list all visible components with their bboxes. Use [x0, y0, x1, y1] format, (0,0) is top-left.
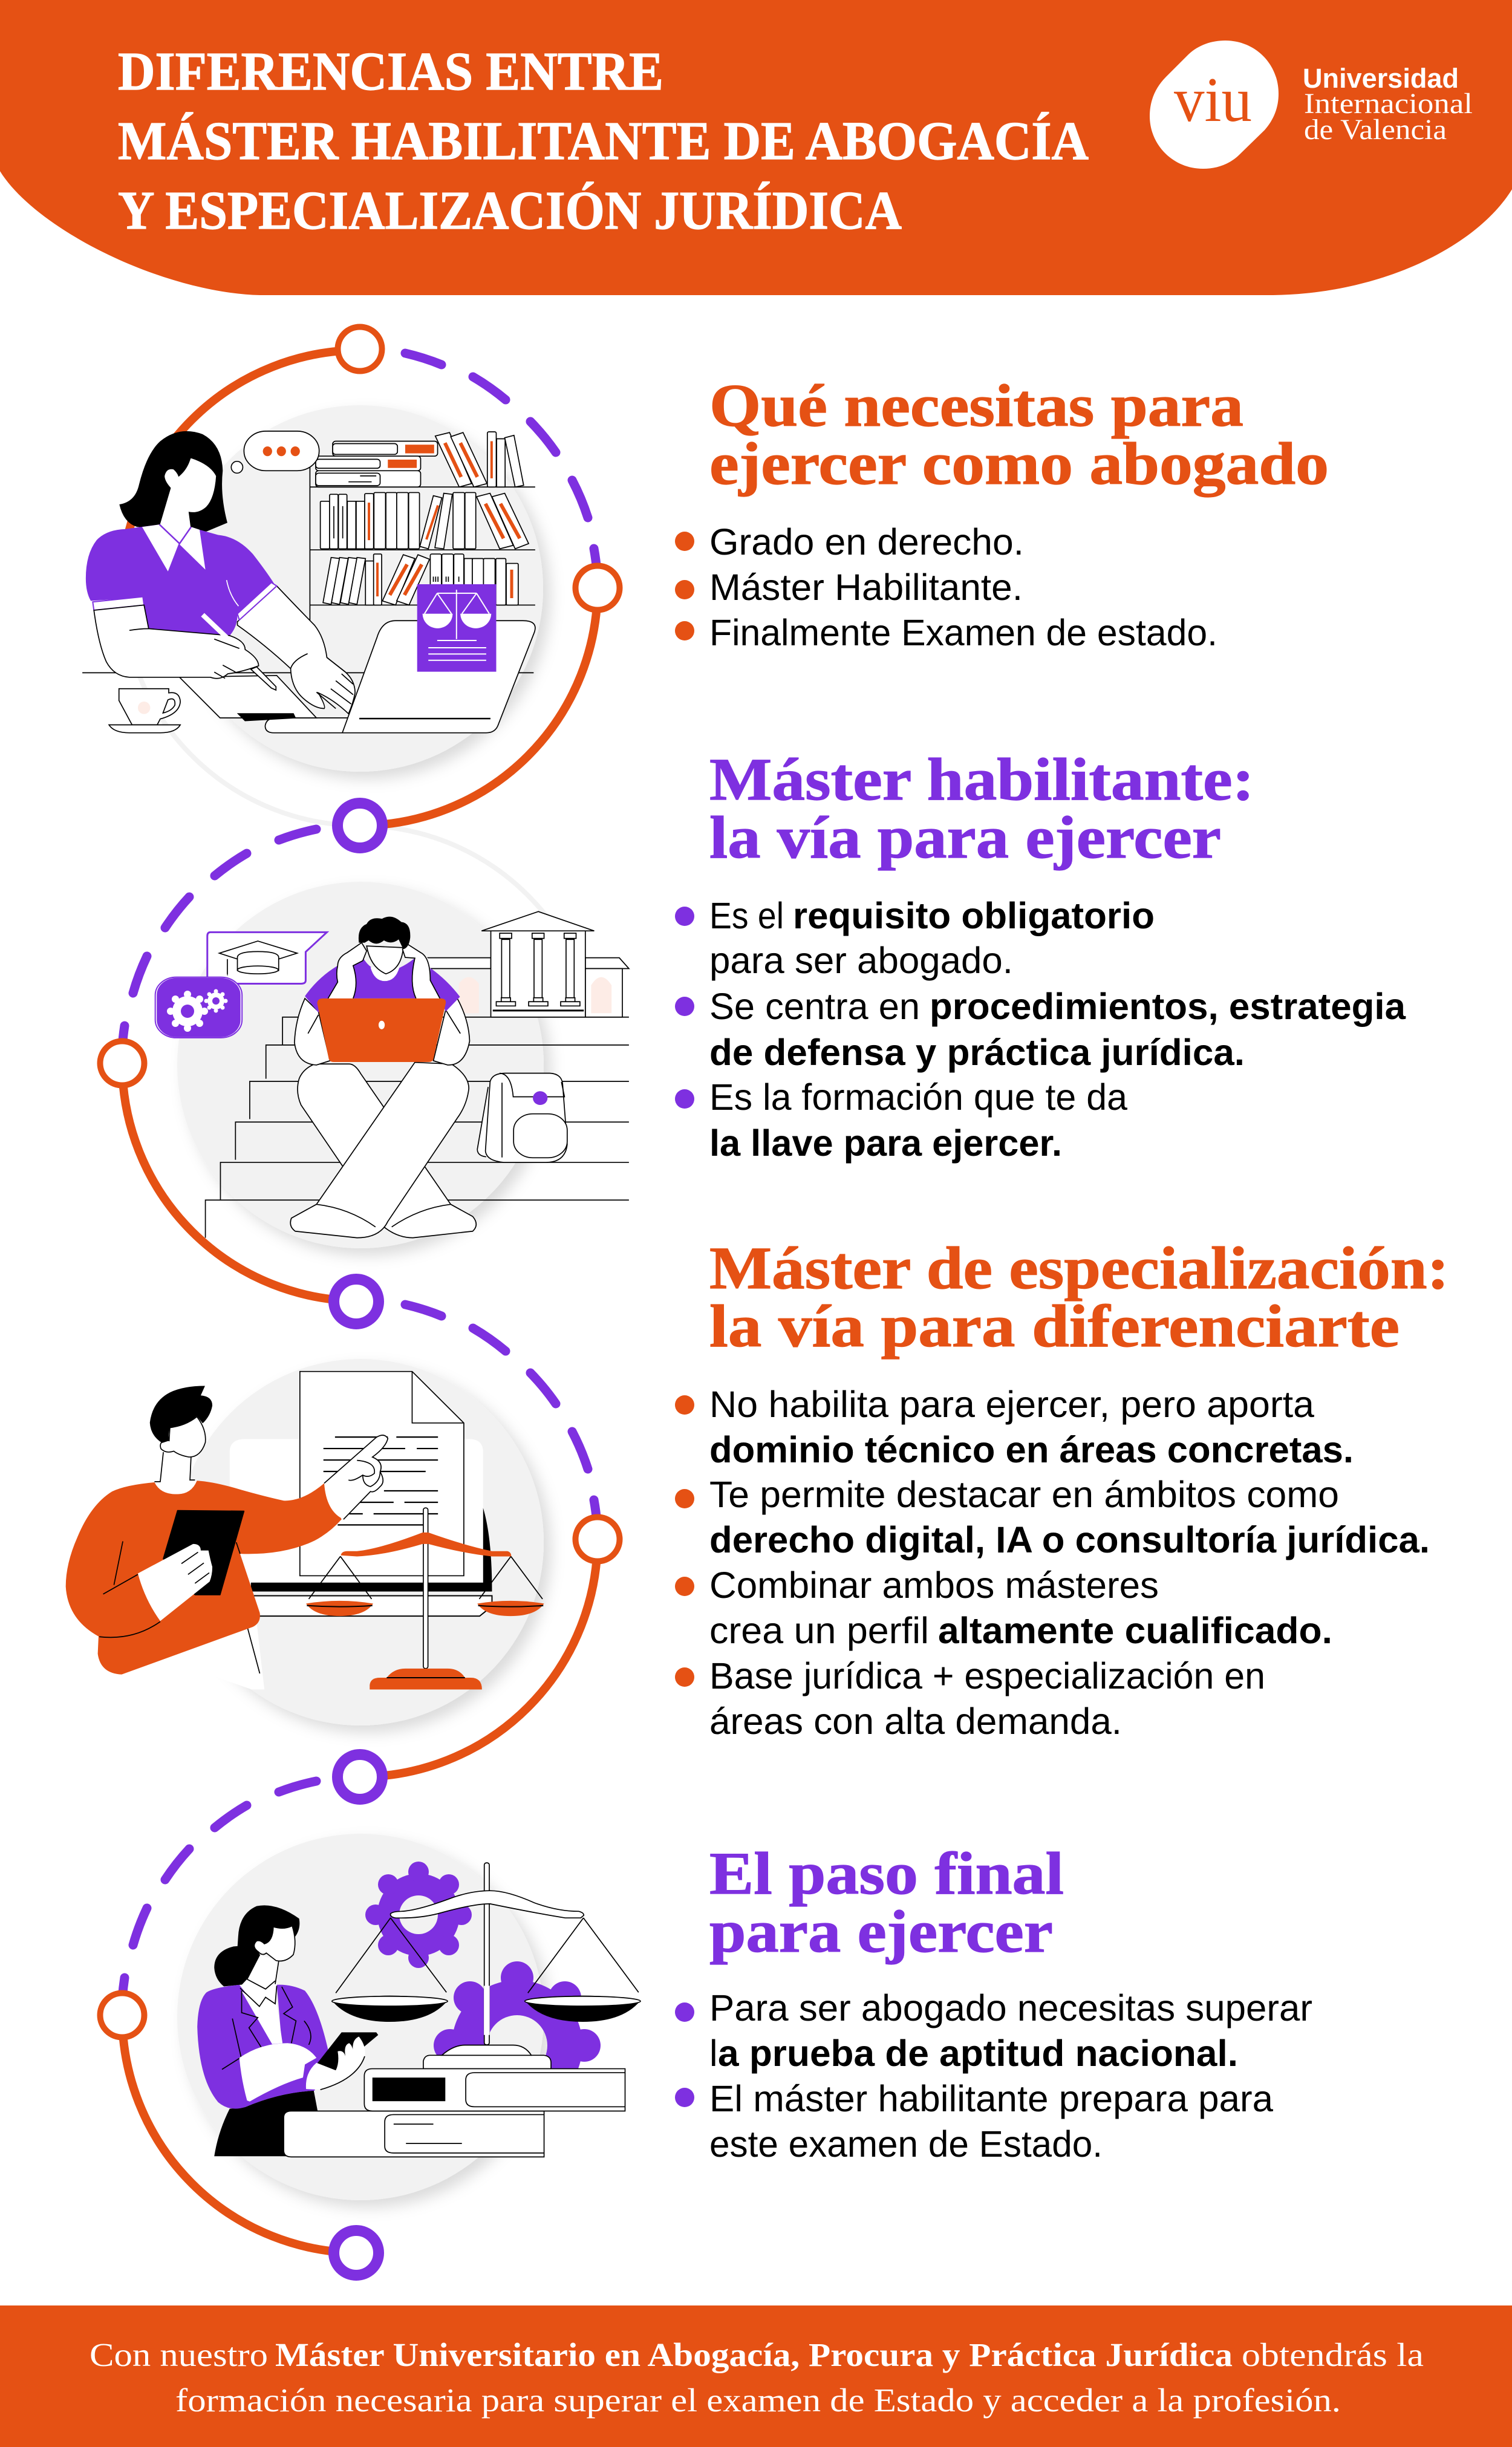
timeline orange arcs [122, 350, 598, 2253]
title [118, 42, 1089, 241]
bullet list: para ser abogado. [709, 940, 1013, 981]
timeline purple dashes [122, 353, 597, 2001]
faint rings [123, 599, 559, 934]
bullet list: de defensa y práctica jurídica. [709, 1032, 1245, 1073]
laptop [265, 621, 535, 733]
panel: el paso final [675, 1840, 1312, 2165]
logo [1150, 41, 1473, 169]
heading: El paso final [709, 1840, 1064, 1907]
books [284, 2045, 625, 2157]
bullet list [675, 1384, 1430, 1742]
logo: Universidad [1303, 63, 1459, 94]
heading [709, 372, 1329, 497]
logo: viu [1174, 64, 1252, 135]
footer text: Máster Universitario en Abogacía, Procura y Práctica Jurídica [275, 2336, 1233, 2373]
document [300, 1372, 464, 1575]
panel: máster de especialización [675, 1234, 1449, 1742]
bullet list: a prueba de aptitud nacional. [718, 2033, 1238, 2074]
bullet list: El máster habilitante prepara para [709, 2078, 1273, 2119]
woman figure [197, 1905, 378, 2156]
paper and coffee cup [109, 676, 316, 733]
title: Y ESPECIALIZACIÓN JURÍDICA [118, 181, 902, 241]
heading: Máster de especialización: [709, 1234, 1449, 1302]
heading [709, 1234, 1449, 1360]
footer text [90, 2336, 1424, 2419]
bullet list: áreas con alta demanda. [709, 1701, 1122, 1742]
bullet list [675, 1987, 1312, 2165]
bullet list: altamente cualificado. [938, 1610, 1332, 1651]
footer band [0, 2305, 1512, 2447]
icon: legal document with scales [417, 584, 496, 672]
bullet list: Se centra en [709, 986, 920, 1027]
illustration: student on stairs with laptop [155, 911, 629, 1238]
heading: la vía para diferenciarte [709, 1292, 1400, 1360]
bullet list: Es la formación que te da [709, 1077, 1127, 1118]
bullet list [675, 895, 1406, 1164]
bullet list: No habilita para ejercer, pero aporta [709, 1384, 1314, 1425]
bullet list [675, 521, 1217, 653]
title: MÁSTER HABILITANTE DE ABOGACÍA [118, 111, 1089, 171]
bullet list: Combinar ambos másteres [709, 1565, 1159, 1606]
scales [332, 1863, 640, 2045]
woman figure [86, 431, 355, 714]
bullet list: l [709, 2033, 718, 2074]
laptop behind document [230, 1439, 492, 1616]
heading: Qué necesitas para [709, 372, 1243, 439]
footer text: formación necesaria para superar el examen de Estado y acceder a la profesión. [175, 2382, 1341, 2419]
man figure [66, 1386, 388, 1675]
illustration: woman at desk with bookshelf [82, 431, 535, 733]
heading: para ejercer [709, 1898, 1053, 1965]
title: DIFERENCIAS ENTRE [118, 42, 663, 102]
bullet list: derecho digital, IA o consultoría jurídica. [709, 1519, 1430, 1560]
panel: máster habilitante [675, 746, 1406, 1164]
bullet list: Te permite destacar en ámbitos como [709, 1474, 1339, 1515]
backpack [477, 1073, 567, 1162]
bullet list: Es el [709, 895, 784, 936]
bullet list: requisito obligatorio [793, 895, 1155, 936]
stairs [206, 1017, 629, 1238]
heading: la vía para ejercer [709, 804, 1221, 871]
scales [306, 1508, 544, 1690]
bullet list: Para ser abogado necesitas superar [709, 1987, 1312, 2028]
footer text: obtendrás la [1242, 2336, 1424, 2373]
speech bubble: gears [155, 977, 242, 1038]
student figure [290, 917, 476, 1238]
icon: white gears [167, 989, 227, 1032]
thought bubble [231, 431, 319, 473]
timeline nodes [100, 327, 619, 2275]
speech bubble: graduation cap [207, 932, 327, 986]
bullet list: Base jurídica + especialización en [709, 1655, 1265, 1696]
bullet list: procedimientos, estrategia [930, 986, 1406, 1027]
heading [709, 1840, 1064, 1965]
heading [709, 746, 1254, 871]
logo: Internacional [1304, 88, 1473, 120]
logo: de Valencia [1304, 114, 1447, 146]
grey discs [177, 405, 544, 2200]
footer text: Con nuestro [90, 2336, 268, 2373]
heading: Máster habilitante: [709, 746, 1254, 813]
icon: purple gears [365, 1862, 601, 2111]
illustration: man pointing at document with scales [66, 1372, 544, 1690]
bullet list: crea un perfil [709, 1610, 929, 1651]
panel: qué necesitas [675, 372, 1329, 653]
books and scales [284, 1863, 640, 2157]
header band [0, 0, 1512, 295]
bullet list: Grado en derecho. [709, 521, 1024, 562]
bullet list: dominio técnico en áreas concretas. [709, 1429, 1354, 1470]
illustration: woman with phone, books, gears and scales [197, 1905, 378, 2156]
bullet list: la llave para ejercer. [709, 1122, 1062, 1164]
building [426, 911, 629, 1017]
heading: ejercer como abogado [709, 430, 1329, 497]
bullet list: Finalmente Examen de estado. [709, 612, 1217, 653]
bullet list: Máster Habilitante. [709, 567, 1023, 608]
bullet list: este examen de Estado. [709, 2123, 1103, 2165]
